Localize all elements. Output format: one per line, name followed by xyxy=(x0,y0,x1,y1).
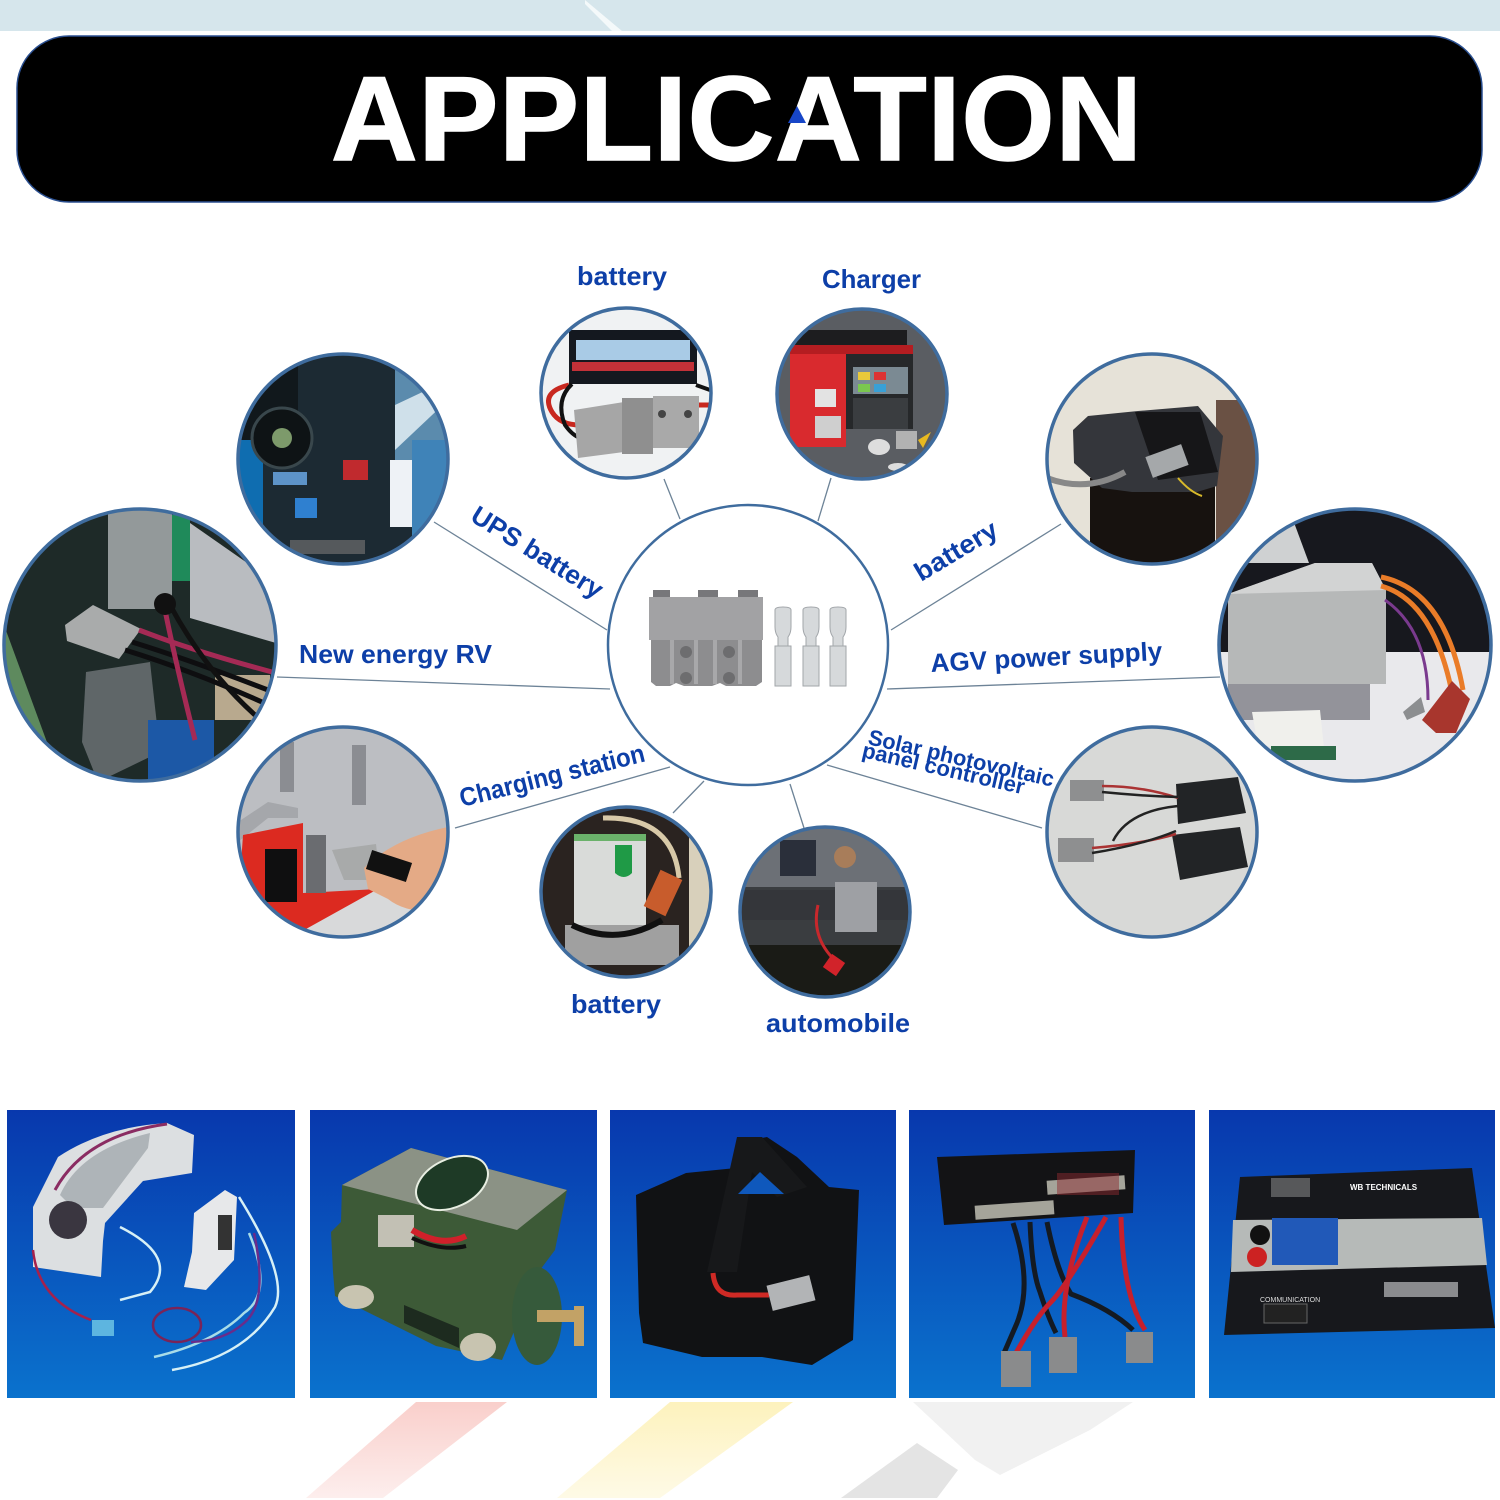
photo circle: new energy RV xyxy=(4,509,276,782)
label: automobile xyxy=(766,1008,910,1038)
panel: lithium battery xyxy=(1209,1110,1495,1398)
label: Charging station xyxy=(456,738,648,813)
panel: lithium battery: COMMUNICATION xyxy=(1260,1297,1320,1304)
photo circle: AGV power supply xyxy=(1219,509,1491,781)
center circle: connector and terminals xyxy=(608,505,888,785)
label: battery xyxy=(577,261,668,291)
photo circle: charging station xyxy=(238,727,448,937)
faded cable background xyxy=(306,1402,1133,1498)
label: New energy RV xyxy=(299,639,493,669)
label: panel controller xyxy=(860,738,1028,799)
label: battery xyxy=(909,514,1003,587)
panel: lithium battery: WB TECHNICALS xyxy=(1350,1183,1418,1192)
panel: black bag xyxy=(610,1110,896,1398)
title: APPLICATION xyxy=(331,52,1142,186)
photo circle: battery meter xyxy=(540,307,713,479)
top decorative strip xyxy=(0,0,1500,31)
blue detail in the letter A xyxy=(788,106,806,123)
label: Solar photovoltaic xyxy=(866,725,1057,792)
panel: green motor xyxy=(310,1110,597,1398)
photo circle: battery box xyxy=(541,807,711,977)
label: battery xyxy=(571,989,662,1019)
panel: busbar harness xyxy=(909,1110,1195,1398)
icon: grey connector xyxy=(649,590,763,686)
photo circle: charger xyxy=(777,309,947,479)
connector lines xyxy=(277,478,1220,828)
photo circle: truck battery xyxy=(1047,354,1257,568)
photo circle: UPS battery xyxy=(238,354,448,564)
label: AGV power supply xyxy=(930,636,1164,678)
panel: wiring harness xyxy=(7,1110,295,1398)
photo circle: solar controller xyxy=(1047,727,1257,937)
label: Charger xyxy=(822,264,921,294)
label: UPS battery xyxy=(466,500,609,605)
title banner xyxy=(17,36,1482,202)
icon: metal terminals xyxy=(775,607,846,686)
photo circle: automobile xyxy=(740,827,910,997)
